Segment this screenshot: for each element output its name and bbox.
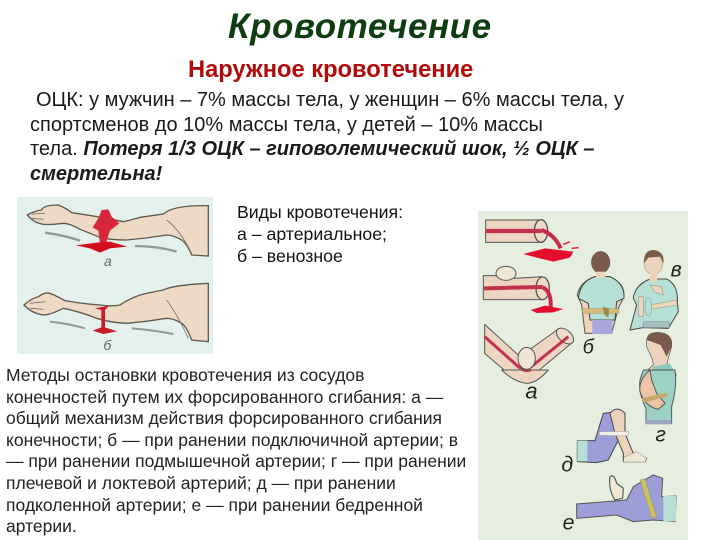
arm b with venous bleeding: б — [103, 337, 112, 353]
illustration: arterial and venous bleeding on arms — [17, 197, 213, 354]
subtitle: external bleeding: Наружное кровотечение — [188, 57, 473, 83]
text block: methods of stopping bleeding: плечевой и локтевой артерий; д — при ранении — [6, 473, 396, 493]
text block: methods of stopping bleeding: артерии. — [6, 516, 77, 536]
text block: blood volume — [30, 89, 624, 184]
text block: blood volume: спортсменов до 10% массы тела, у детей – 10% массы — [30, 114, 543, 136]
figure d: seated leg: д — [561, 453, 573, 477]
figure d: seated leg — [561, 409, 666, 477]
figure e: lying leg — [525, 379, 676, 534]
text block: methods of stopping bleeding: конечностей путем их форсированного сгибания: а — — [6, 387, 443, 407]
text block: methods of stopping bleeding: Методы остановки кровотечения из сосудов — [6, 365, 364, 385]
figure v: front view: в — [671, 258, 682, 282]
text block: methods of stopping bleeding: конечности; б — при ранении подключичной артерии; в — [6, 430, 458, 450]
figure b: back view — [577, 251, 624, 334]
figure v: front view: б — [583, 336, 595, 358]
text block: methods of stopping bleeding: — при ранении подмышечной артерии; г — при ранении — [6, 451, 466, 471]
title: Кровотечение — [228, 7, 492, 46]
text block: methods of stopping bleeding — [6, 365, 466, 536]
text block: types of bleeding: Виды кровотечения: — [237, 202, 403, 222]
figure e: lying leg: е — [563, 510, 575, 534]
illustration: forced flexion methods — [478, 211, 688, 540]
vessel cross-sections — [483, 220, 579, 375]
figure v: front view — [583, 250, 682, 358]
arm a with arterial bleeding — [27, 205, 208, 269]
text block: types of bleeding: б – венозное — [237, 246, 343, 266]
figure g lower part — [640, 370, 676, 424]
arm a with arterial bleeding: а — [104, 253, 112, 269]
text block: methods of stopping bleeding: общий механизм действия форсированного сгибания — [6, 408, 442, 428]
text block: types of bleeding — [237, 202, 403, 266]
figure e: lying leg: а — [525, 379, 538, 404]
figure d: seated leg: г — [655, 422, 666, 446]
text block: blood volume: тела. Потеря 1/3 ОЦК – гиповолемический шок, ½ ОЦК – — [30, 138, 594, 160]
text block: types of bleeding: а – артериальное; — [237, 224, 387, 244]
text block: blood volume: ОЦК: у мужчин – 7% массы тела, у женщин – 6% массы тела, у — [36, 89, 624, 111]
arm b with venous bleeding — [24, 283, 208, 353]
text block: blood volume: смертельна! — [30, 162, 162, 184]
text block: methods of stopping bleeding: подколенной артерии; е — при ранении бедренной — [6, 495, 423, 515]
figure g: side view — [642, 332, 677, 375]
bent vessel lower part — [502, 370, 548, 383]
